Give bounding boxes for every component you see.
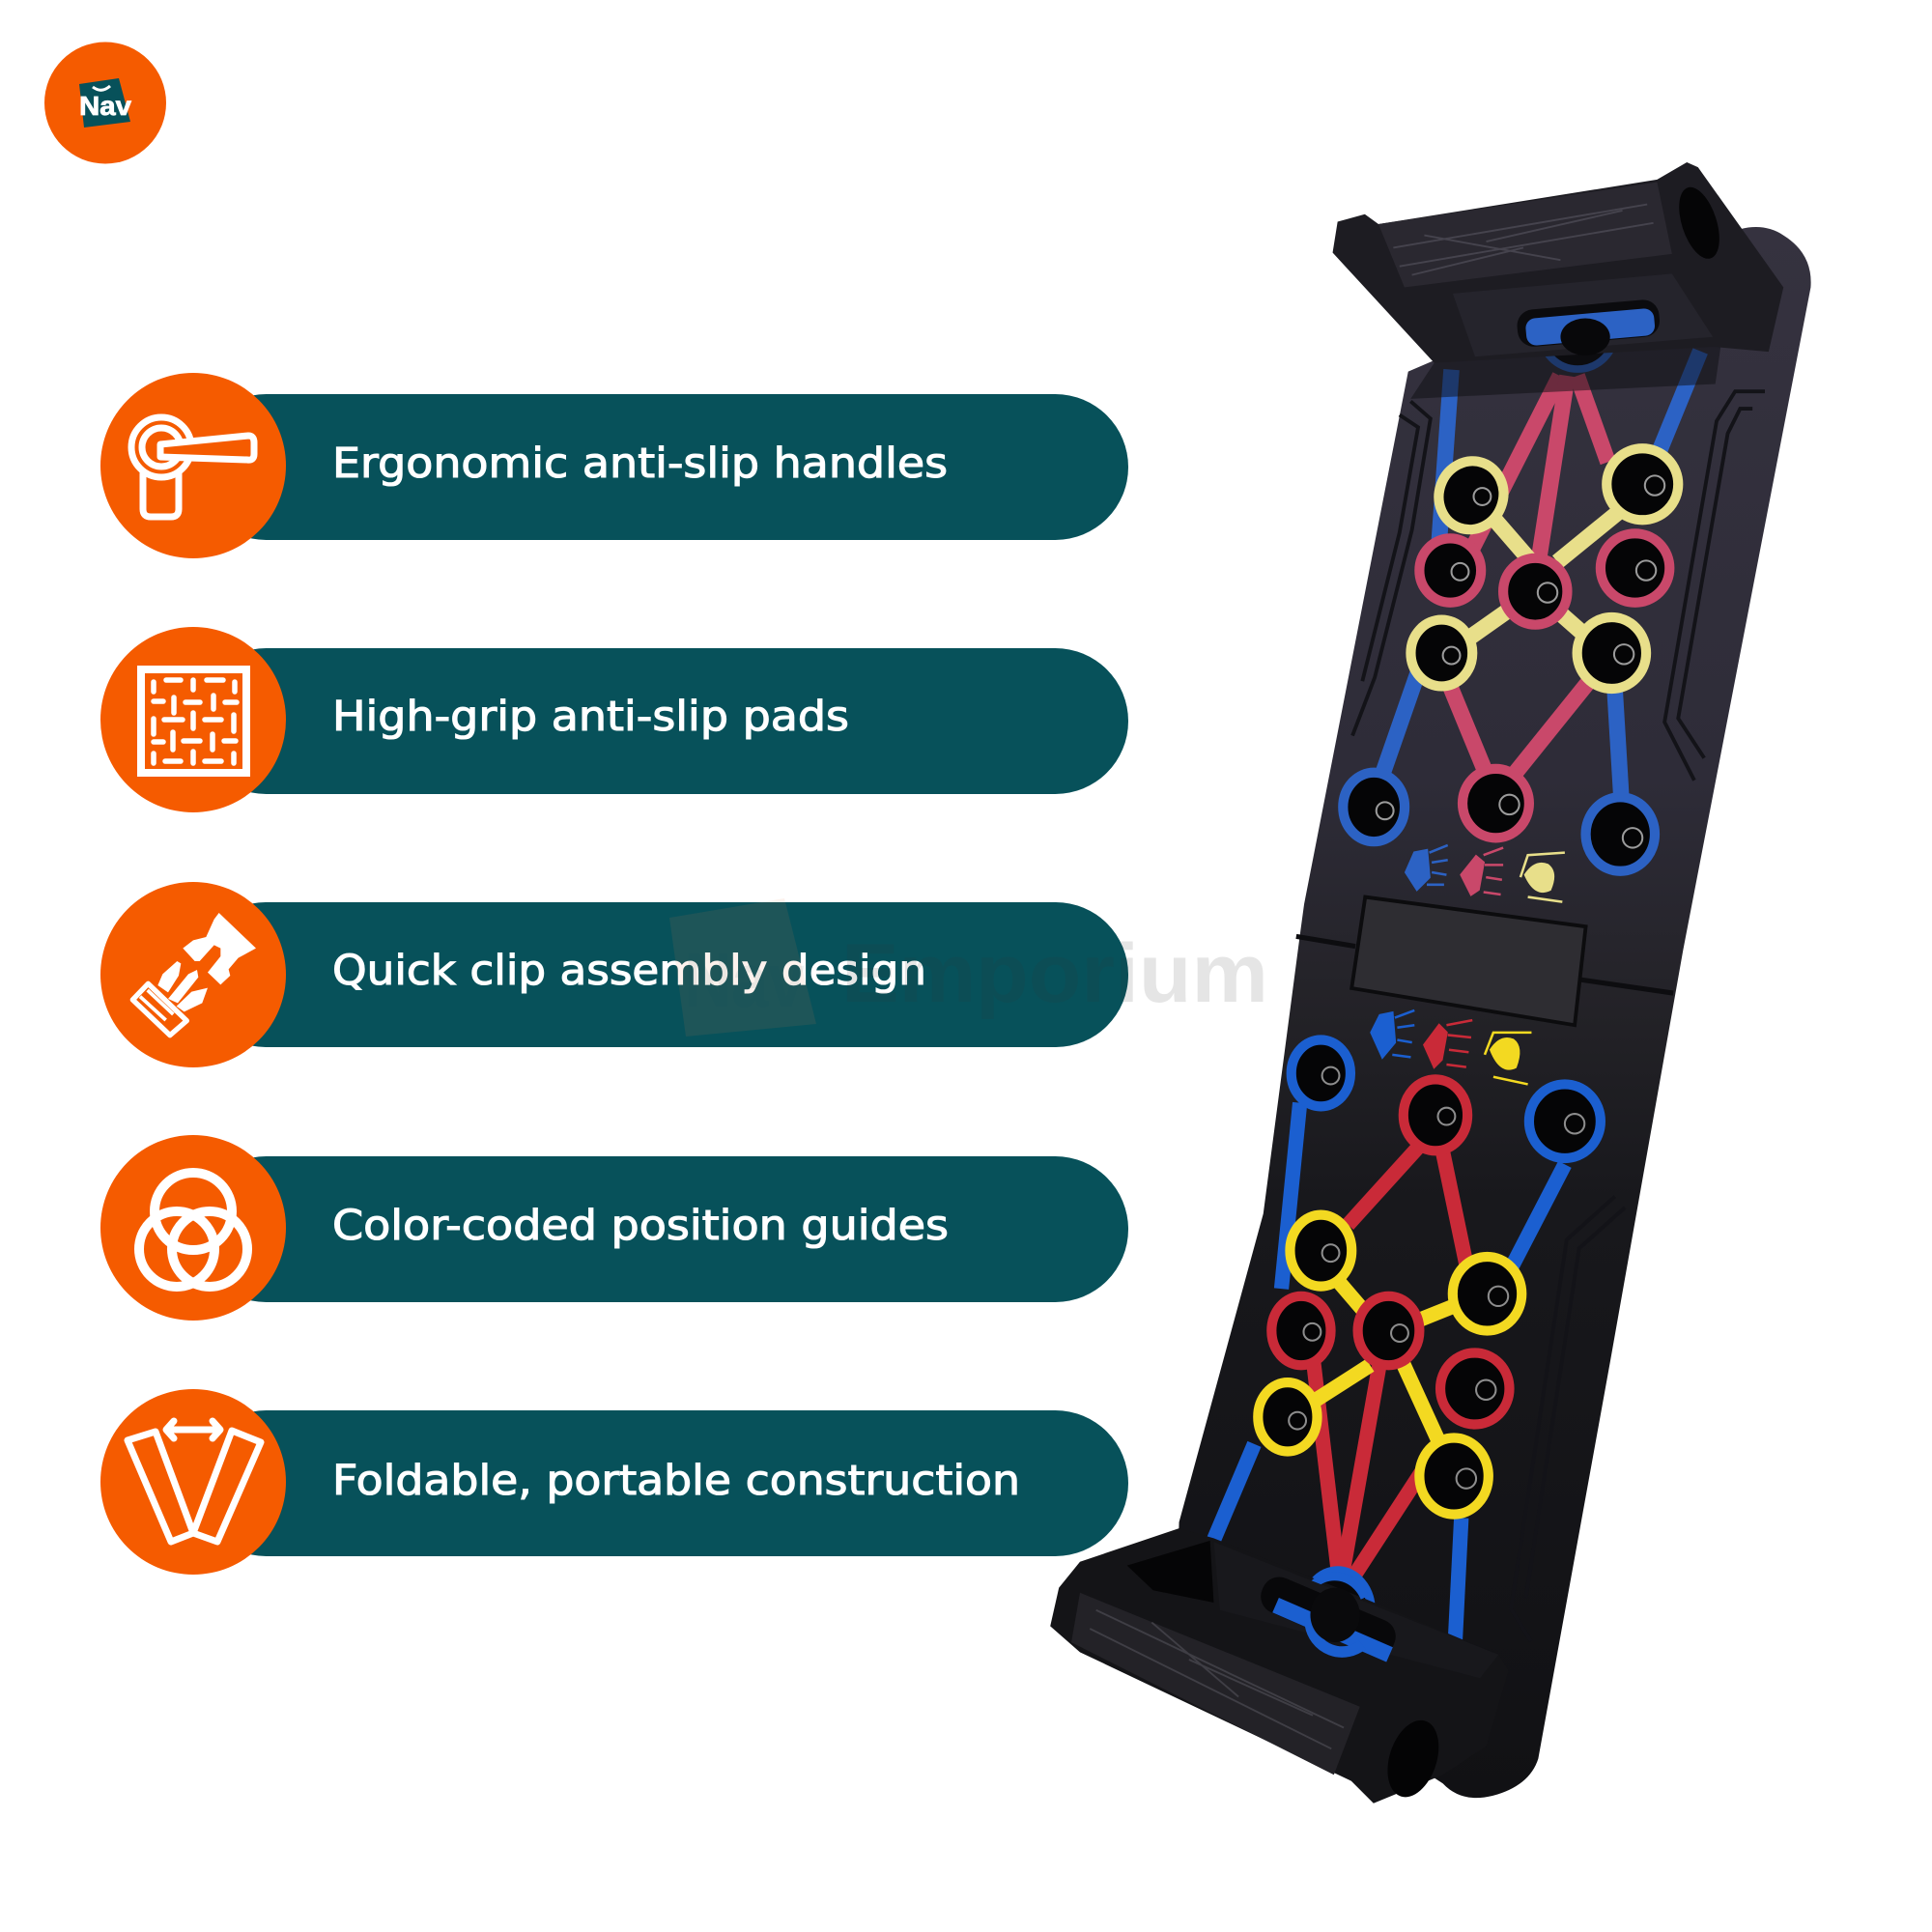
upper hole pins [1377, 475, 1664, 848]
centre panel [1351, 897, 1586, 1025]
lower yellow guide lines [1309, 1275, 1466, 1448]
logo badge [44, 43, 166, 164]
top handle [1333, 162, 1783, 399]
roller [1378, 182, 1672, 287]
hole under top handle [1541, 295, 1615, 369]
ring top seen over bracket [1310, 1577, 1365, 1598]
bracket [1050, 1528, 1509, 1804]
bottom blue ring [1304, 1571, 1371, 1650]
feature row: clip [100, 882, 1128, 1067]
icon: clip buckle [132, 913, 256, 1036]
feature row: foldable [100, 1389, 1128, 1575]
slot panel [1453, 273, 1713, 356]
watermark [669, 898, 1268, 1037]
inner panel [1213, 1542, 1498, 1678]
blue strip [1276, 1605, 1390, 1655]
well [1127, 1541, 1213, 1603]
shadow [1410, 341, 1721, 399]
roller end opening [1671, 183, 1727, 264]
roller [1071, 1593, 1360, 1775]
label: handles: Ergonomic anti-slip handles [332, 440, 948, 488]
watermark: Emporium [841, 927, 1268, 1020]
seam [1296, 936, 1673, 993]
label: colour guides: Color-coded position guides [332, 1202, 949, 1250]
muscle marks: upper [1406, 845, 1565, 902]
label: foldable: Foldable, portable construction [332, 1457, 1020, 1505]
label: pads: High-grip anti-slip pads [332, 693, 849, 741]
lower holes [1258, 1040, 1601, 1515]
upper pink guide lines [1444, 376, 1608, 779]
lower hole pins [1289, 1067, 1584, 1489]
label: clip: Quick clip assembly design [332, 947, 926, 995]
board body and grooves [1177, 227, 1811, 1798]
roller end opening [1378, 1714, 1448, 1804]
slot [1256, 1572, 1401, 1662]
icon: maze pad [141, 669, 246, 773]
icon: overlapping rings [139, 1173, 247, 1287]
upper yellow guide lines [1468, 508, 1624, 645]
icon: handle [131, 417, 254, 517]
product: folding push-up board [1050, 162, 1811, 1804]
logo badge: Nav [79, 91, 131, 121]
icon: folded board [128, 1421, 261, 1542]
bracket [1333, 162, 1783, 363]
board face details [1213, 352, 1700, 1641]
upper holes [1343, 448, 1678, 871]
lower red guide lines [1314, 1146, 1466, 1583]
bottom handle [1050, 1528, 1509, 1804]
upper blue guide lines [1378, 352, 1700, 801]
lower blue guide lines [1213, 1103, 1565, 1641]
feature row: pads [100, 627, 1128, 812]
blue strip [1525, 308, 1656, 346]
feature row: colour guides [100, 1135, 1128, 1321]
feature row: handles [100, 373, 1128, 558]
muscle marks: lower [1372, 1010, 1531, 1084]
watermark: Nav [684, 937, 805, 1023]
